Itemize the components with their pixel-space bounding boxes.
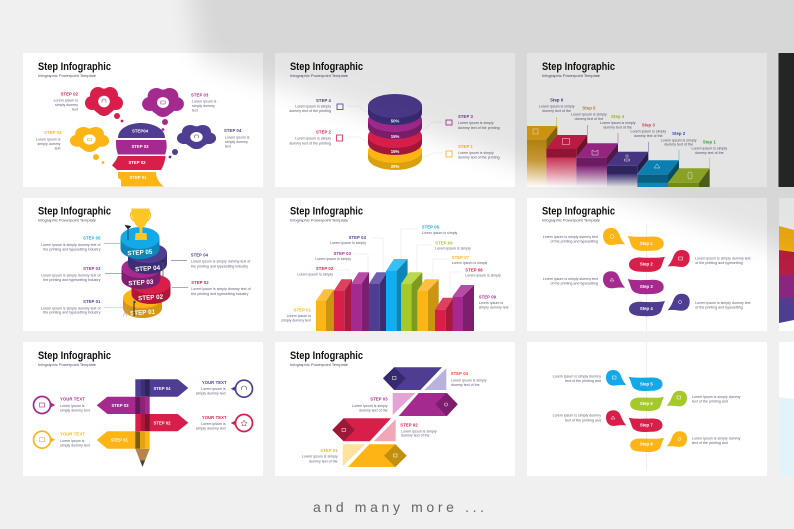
text: bar labels: STEP 02 [316, 266, 334, 271]
text: left steps: the printing and typesetting industry [43, 311, 101, 315]
panel: pencil signposts [23, 342, 263, 476]
text: right steps: STEP 02 [191, 280, 209, 285]
step labels: dummy text of the [695, 151, 724, 155]
panel: stacked cylinder [275, 53, 515, 187]
icons on stairs [533, 129, 692, 179]
text: ring labels: YOUR TEXT [60, 396, 85, 402]
head silhouette bands [112, 123, 167, 186]
blob: step 2: Step 2 [640, 262, 653, 266]
text: blob descriptions [543, 235, 751, 310]
text: step 03: STEP 03 [191, 92, 209, 98]
text: step 3: dummy text of the printing [458, 126, 500, 130]
panel: 3D bar chart [275, 198, 515, 331]
stairs [527, 126, 710, 187]
text: left steps: the printing and typesetting industry [43, 278, 101, 282]
cloud: step 03 [142, 88, 184, 117]
text: zigzag labels: Lorem ipsum is simply [302, 455, 338, 459]
panel: blob steps 5 to 8 [527, 342, 767, 476]
bars [316, 259, 474, 331]
text: step 2 [289, 130, 332, 146]
blob: step 3 [603, 271, 664, 294]
blob: step 4 [629, 294, 690, 316]
text: bar labels: STEP 08 [465, 268, 483, 272]
text: left steps: STEP 01 [83, 299, 101, 304]
panel: blob steps 1 to 4 [527, 198, 767, 331]
text: zigzag labels: Lorem ipsum is simply [352, 404, 388, 408]
tower of discs [120, 227, 170, 318]
step labels: dummy text of the [603, 126, 632, 130]
heading [290, 61, 363, 78]
text: step 1 [458, 144, 500, 160]
text: bar labels: Lorem ipsum is simply [330, 241, 366, 245]
cloud: step 02 [85, 87, 123, 116]
heading [38, 350, 111, 367]
step labels: Lorem ipsum is simply [539, 104, 575, 108]
text: blob descriptions: of the printing and typesetting [695, 261, 743, 265]
heading [542, 206, 615, 222]
text: ring labels: simply dummy text [196, 426, 226, 430]
heading [38, 61, 111, 78]
heading: Step Infographic [290, 61, 363, 73]
text: step 03: simply dummy [192, 104, 215, 108]
step labels: dummy text of the [664, 142, 693, 146]
heading: Infographic Powerpoint Template [290, 74, 348, 78]
shape: step 04 [383, 367, 446, 390]
shape: step 02 [332, 418, 396, 441]
text: bar labels: Lorem ipsum is simply [435, 246, 471, 250]
tower of discs: STEP 03 [128, 279, 154, 287]
head silhouette bands: STEP04 [132, 128, 149, 134]
text: blob descriptions: text of the printing and [692, 441, 728, 445]
text: ring labels: Lorem ipsum is [201, 387, 226, 391]
tower of discs: STEP 05 [127, 249, 153, 257]
text: blob descriptions: Lorem ipsum is simply dummy text [695, 256, 751, 260]
blob: step 2 [629, 250, 690, 272]
text: ring labels: Lorem ipsum is [60, 404, 85, 408]
text: zigzag labels: STEP 02 [400, 422, 418, 428]
text: step 03: Lorem ipsum is [192, 100, 217, 104]
text: zigzag labels: dummy text of the [451, 383, 480, 387]
text: right steps: Lorem ipsum is simply dummy text of [191, 287, 251, 291]
text: left steps: STEP 03 [83, 266, 101, 271]
text: ring labels: simply dummy text [196, 392, 226, 396]
text: blob descriptions: Lorem ipsum is simply dummy text [543, 277, 598, 281]
text: zigzag labels [302, 371, 487, 463]
panel: next slide edge with colour bands [779, 198, 794, 331]
step labels: dummy text of the [542, 109, 571, 113]
cylinder layers: 15% [391, 134, 399, 139]
panel: zigzag hexagon steps [275, 342, 515, 476]
text: step 1: STEP 1 [458, 144, 474, 149]
text: bar labels: STEP 05 [422, 224, 440, 230]
blob: step 8: Step 8 [640, 442, 653, 446]
text: step 01: STEP 01 [44, 130, 62, 135]
text: step 1: Lorem ipsum is simply [458, 151, 494, 155]
text: blob descriptions: Lorem ipsum is simply dummy [692, 395, 741, 399]
text: bar labels: Lorem ipsum is simply [452, 261, 488, 265]
text: step 2: Lorem ipsum is simply [295, 136, 331, 140]
text: blob descriptions: text of the printing and [692, 400, 728, 404]
text: step 2: STEP 2 [316, 130, 332, 134]
text: step 01: Lorem ipsum is [36, 138, 61, 142]
text: ring labels: simply dummy text [60, 408, 90, 412]
text: zigzag labels: Lorem ipsum is simply [451, 379, 487, 383]
text: step 3: STEP 3 [458, 114, 474, 119]
text: left steps: Lorem ipsum is simply dummy text of [41, 243, 100, 247]
pencil flags: STEP 04 [153, 386, 171, 391]
heading: Infographic Powerpoint Template [38, 363, 96, 367]
text: left steps: the printing and typesetting industry [43, 248, 101, 252]
text: ring labels: Lorem ipsum is [201, 422, 226, 426]
text: bar labels: Lorem ipsum is simply [297, 272, 333, 276]
text: ring labels: YOUR TEXT [60, 432, 85, 436]
footer caption: and many more ... [313, 499, 484, 515]
pencil flags: STEP 03 [111, 403, 129, 408]
blob: step 4: Step 4 [640, 306, 653, 311]
step labels: dummy text of the [634, 134, 663, 138]
heading: Step Infographic [290, 206, 363, 218]
step labels: Lorem ipsum is simply [600, 121, 636, 125]
text: step 2: dummy text of the printing [289, 142, 331, 146]
text: step 04 [224, 128, 250, 148]
text: blob descriptions [553, 375, 741, 445]
heading: Infographic Powerpoint Template [290, 218, 348, 222]
text: zigzag labels: STEP 01 [320, 448, 338, 453]
text: bar labels: Lorem ipsum is simply [422, 231, 458, 235]
text: right steps: Lorem ipsum is simply dummy text of [191, 260, 250, 264]
text: blob descriptions: Lorem ipsum is simply dummy [553, 414, 601, 418]
connector lines [347, 106, 443, 158]
text: ring labels: Lorem ipsum is [60, 439, 85, 443]
shape: step 03 [393, 393, 458, 416]
blob: step 1: Step 1 [640, 241, 653, 246]
text: step 04: STEP 04 [224, 128, 242, 133]
panel: cylinder tower with trophy [23, 198, 263, 331]
text: bar labels: Lorem ipsum is [287, 314, 311, 318]
text: blob descriptions: of the printing and typesetting [695, 306, 743, 310]
heading: Step Infographic [38, 61, 111, 73]
step labels: Lorem ipsum is simply [691, 146, 727, 150]
text: zigzag labels: Lorem ipsum is simply [401, 429, 437, 433]
text: right steps: the printing and typesetting industry [191, 264, 248, 268]
text: step 4: STEP 4 [316, 98, 332, 103]
cylinder layers [368, 94, 422, 170]
tower of discs: STEP 04 [135, 265, 161, 273]
blob: step 6 [630, 391, 687, 411]
text: right steps: STEP 04 [191, 252, 209, 258]
head silhouette bands: STEP 01 [129, 175, 147, 180]
heading [290, 350, 363, 367]
text: blob descriptions: text of the printing and [565, 379, 601, 383]
text: bar labels [281, 224, 509, 322]
step labels: dummy text of the [575, 117, 603, 121]
pencil flags: STEP 02 [153, 420, 171, 426]
head silhouette bands: STEP 02 [128, 160, 146, 165]
text: step 02: STEP 02 [61, 92, 79, 96]
text: bar labels: STEP 06 [435, 240, 453, 246]
blob: step 5: Step 5 [640, 382, 653, 386]
text: right steps [191, 252, 251, 296]
heading: Infographic Powerpoint Template [542, 74, 600, 78]
text: bar labels: Lorem ipsum is simply [465, 274, 501, 278]
heading: Infographic Powerpoint Template [542, 218, 600, 222]
text: bar labels: simply dummy text [281, 318, 311, 322]
text: blob descriptions: Lorem ipsum is simply dummy text [695, 301, 751, 305]
pencil flags: STEP 01 [111, 438, 128, 442]
text: bar labels: STEP 01 [294, 308, 312, 312]
shape: step 01 [343, 444, 407, 467]
pencil flags [97, 379, 188, 467]
step labels: Lorem ipsum is simply [630, 130, 666, 134]
step labels: Step 1 [703, 140, 716, 144]
text: step 02: Lorem ipsum is [54, 98, 78, 102]
text: step 01 [36, 130, 62, 150]
text: step 3 [458, 114, 500, 130]
leader lines [104, 243, 188, 307]
leader lines [337, 229, 461, 296]
text: left steps: STEP 05 [83, 236, 101, 240]
panel: head with thought clouds [23, 53, 263, 187]
step labels: Step 6 [550, 98, 564, 102]
text: zigzag labels: dummy text of the [359, 408, 388, 412]
text: step 1: dummy text of the printing [458, 156, 500, 160]
text: right steps: the printing and typesetting industry [191, 292, 249, 296]
panel: next slide edge with light blue [779, 342, 794, 476]
text: bar labels: STEP 09 [479, 294, 497, 300]
text: step 02: simply dummy [55, 103, 78, 107]
cylinder layers: 50% [391, 118, 399, 124]
text: left steps: Lorem ipsum is simply dummy text of [41, 274, 100, 278]
tower of discs: STEP 01 [130, 309, 156, 317]
head silhouette bands: STEP 03 [131, 144, 149, 149]
text: blob descriptions: Lorem ipsum is simply dummy text [543, 235, 598, 239]
text: step 4: Lorem ipsum is simply [295, 104, 331, 108]
heading [542, 61, 615, 78]
text: step 4 [289, 98, 332, 113]
blob: step 3: Step 3 [640, 284, 653, 289]
step labels [539, 98, 727, 155]
text: bar labels: Lorem ipsum is [479, 301, 503, 305]
text: blob descriptions: Lorem ipsum is simply dummy [692, 437, 741, 441]
text: step 4: dummy text of the printing [289, 109, 331, 113]
stem lines [556, 117, 710, 168]
cloud: step 04 [177, 125, 216, 149]
text: left steps [41, 236, 101, 315]
step labels: Lorem ipsum is simply [661, 138, 697, 142]
heading [38, 206, 111, 222]
blob: step 6: Step 6 [640, 401, 653, 406]
text: step 01: text [55, 146, 60, 150]
heading: Step Infographic [542, 206, 615, 218]
heading: Step Infographic [38, 350, 111, 362]
panel: 3D staircase [527, 53, 767, 187]
text: ring labels: YOUR TEXT [202, 380, 227, 385]
icon: bags [336, 104, 452, 157]
heading [290, 206, 363, 222]
text: blob descriptions: Lorem ipsum is simply dummy [553, 375, 601, 379]
text: step 04: simply dummy [225, 140, 248, 144]
thought bubbles [93, 113, 178, 164]
text: step 04: Lorem ipsum is [225, 136, 250, 140]
step labels: Step 3 [642, 122, 655, 128]
text: blob descriptions: of the printing and typesetting [551, 282, 598, 286]
text: bar labels: simply dummy text [479, 306, 509, 310]
heading: Step Infographic [542, 61, 615, 73]
step labels: Step 5 [582, 106, 596, 110]
text: zigzag labels: dummy text of the [309, 459, 338, 463]
text: blob descriptions: of the printing and typesetting [551, 240, 598, 244]
text: step 03: text [192, 108, 198, 112]
heading: Step Infographic [290, 350, 363, 362]
text: zigzag labels: dummy text of the [401, 434, 430, 438]
blob: step 7: Step 7 [640, 422, 653, 428]
step labels: Step 2 [672, 131, 686, 136]
text: bar labels: Lorem ipsum is simply [315, 257, 351, 261]
text: step 02 [54, 92, 79, 112]
tower of discs: STEP 02 [138, 294, 164, 302]
heading: Infographic Powerpoint Template [290, 363, 348, 367]
window shadow overlay [185, 0, 794, 275]
text: step 04: text [225, 144, 231, 148]
text: ring labels: YOUR TEXT [202, 415, 227, 420]
heading: Infographic Powerpoint Template [38, 74, 96, 78]
blob: step 8 [630, 431, 687, 452]
text: ring labels [60, 380, 227, 448]
cylinder layers: 15% [391, 149, 399, 154]
text: left steps: Lorem ipsum is simply dummy text of [41, 306, 100, 310]
text: step 01: simply dummy [38, 142, 61, 146]
step labels: Step 4 [611, 114, 625, 119]
figures and ladder [123, 225, 164, 317]
text: step 03 [191, 92, 217, 112]
text: ring labels: simply dummy text [60, 444, 90, 448]
heading: Infographic Powerpoint Template [38, 218, 96, 222]
text: zigzag labels: STEP 04 [451, 371, 469, 376]
blob: step 1 [603, 228, 664, 251]
text: blob descriptions: text of the printing and [565, 418, 601, 422]
heading: Step Infographic [38, 206, 111, 218]
icon: trophy [131, 208, 150, 240]
blob: step 5 [606, 370, 663, 391]
blob: step 7 [606, 410, 663, 432]
text: bar labels: STEP 03 [334, 251, 352, 256]
cloud: step 01 [70, 127, 109, 152]
step labels: Lorem ipsum is simply [571, 112, 607, 116]
icon rings [34, 380, 252, 448]
text: step 02: text [72, 108, 78, 112]
text: step 3: Lorem ipsum is simply [458, 121, 494, 125]
cylinder layers: 20% [391, 164, 399, 169]
text: zigzag labels: STEP 03 [370, 396, 388, 402]
text: bar labels: STEP 04 [349, 235, 367, 240]
panel: next slide edge dark [778, 53, 794, 187]
text: bar labels: STEP 07 [452, 255, 470, 260]
